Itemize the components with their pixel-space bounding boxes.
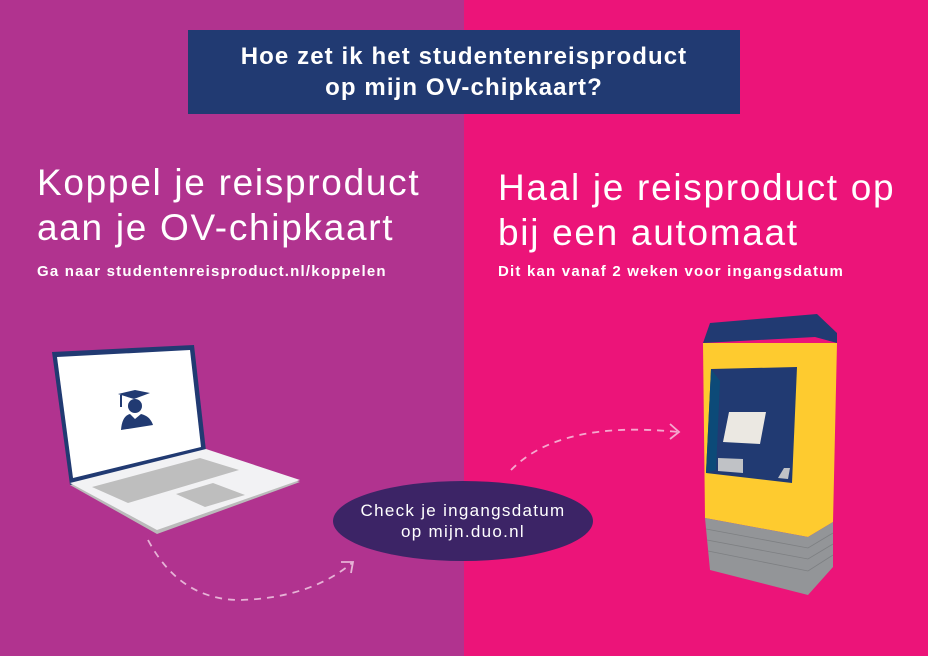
callout: check date: op mijn.duo.nl: [401, 522, 525, 541]
title: [188, 30, 740, 114]
arrow: oval to machine: [511, 424, 679, 470]
icon: ticket machine: [703, 314, 837, 595]
heading: right: [498, 167, 895, 253]
icon: graduate: [118, 390, 153, 430]
icon: laptop: [52, 345, 300, 534]
callout: check date: [333, 481, 593, 561]
subtext: right: Dit kan vanaf 2 weken voor ingangsdatum: [498, 263, 844, 280]
heading: right: Haal je reisproduct op: [498, 167, 895, 208]
callout: check date: Check je ingangsdatum: [361, 501, 565, 520]
arrow: laptop to oval: [148, 540, 353, 600]
heading: left: [37, 162, 420, 248]
title: op mijn OV-chipkaart?: [325, 74, 603, 101]
heading: left: Koppel je reisproduct: [37, 162, 420, 203]
title: Hoe zet ik het studentenreisproduct: [241, 43, 687, 70]
subtext: left: Ga naar studentenreisproduct.nl/koppelen: [37, 263, 387, 280]
heading: right: bij een automaat: [498, 212, 799, 253]
heading: left: aan je OV-chipkaart: [37, 207, 394, 248]
